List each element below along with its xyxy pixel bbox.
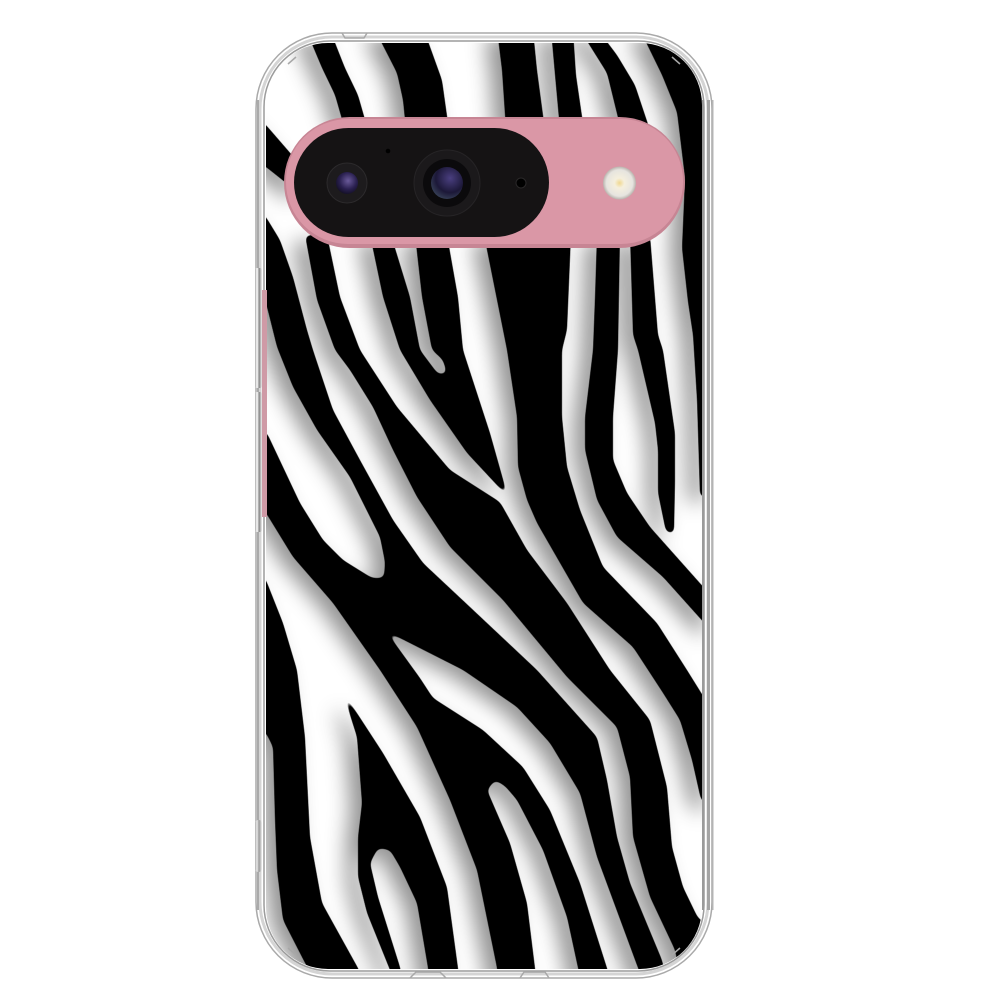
stripe: top 1 <box>306 30 368 130</box>
sensor dot <box>516 178 526 188</box>
stripe: diagonal to lower right <box>305 235 715 985</box>
stripe: Y with white finger <box>370 235 508 497</box>
zebra black stripes <box>255 30 715 985</box>
small lens <box>327 163 367 203</box>
camera bar rim <box>284 117 685 248</box>
stripe: top 2 <box>375 30 449 130</box>
zebra back panel <box>255 30 715 985</box>
stripe: left of camera <box>266 125 291 208</box>
stripe: lower left <box>266 580 359 969</box>
illustration: zebra phone case <box>255 32 714 979</box>
side buttons <box>255 268 267 872</box>
stripe: top 3 <box>497 30 545 130</box>
flash <box>603 166 636 200</box>
microphone dot <box>386 149 390 153</box>
stripe: top 4 <box>551 30 584 130</box>
main lens <box>414 150 480 216</box>
camera bar <box>284 117 685 248</box>
pink phone edge <box>262 290 267 517</box>
clear case frame <box>256 33 714 978</box>
stripe: centre trunk <box>484 235 715 810</box>
stripe: top 5 <box>574 43 648 124</box>
lower button <box>255 820 262 872</box>
lens window <box>294 128 549 237</box>
stripe: large diagonal with fingers <box>255 205 668 985</box>
stripe: right edge sliver <box>640 30 715 497</box>
camera bar face <box>286 119 683 244</box>
stripe: narrow right taper <box>630 235 675 534</box>
stripe: lower inner with finger <box>342 690 460 985</box>
power and volume buttons <box>255 268 262 388</box>
case bumps <box>288 33 680 978</box>
stripe: curved right <box>585 235 715 635</box>
